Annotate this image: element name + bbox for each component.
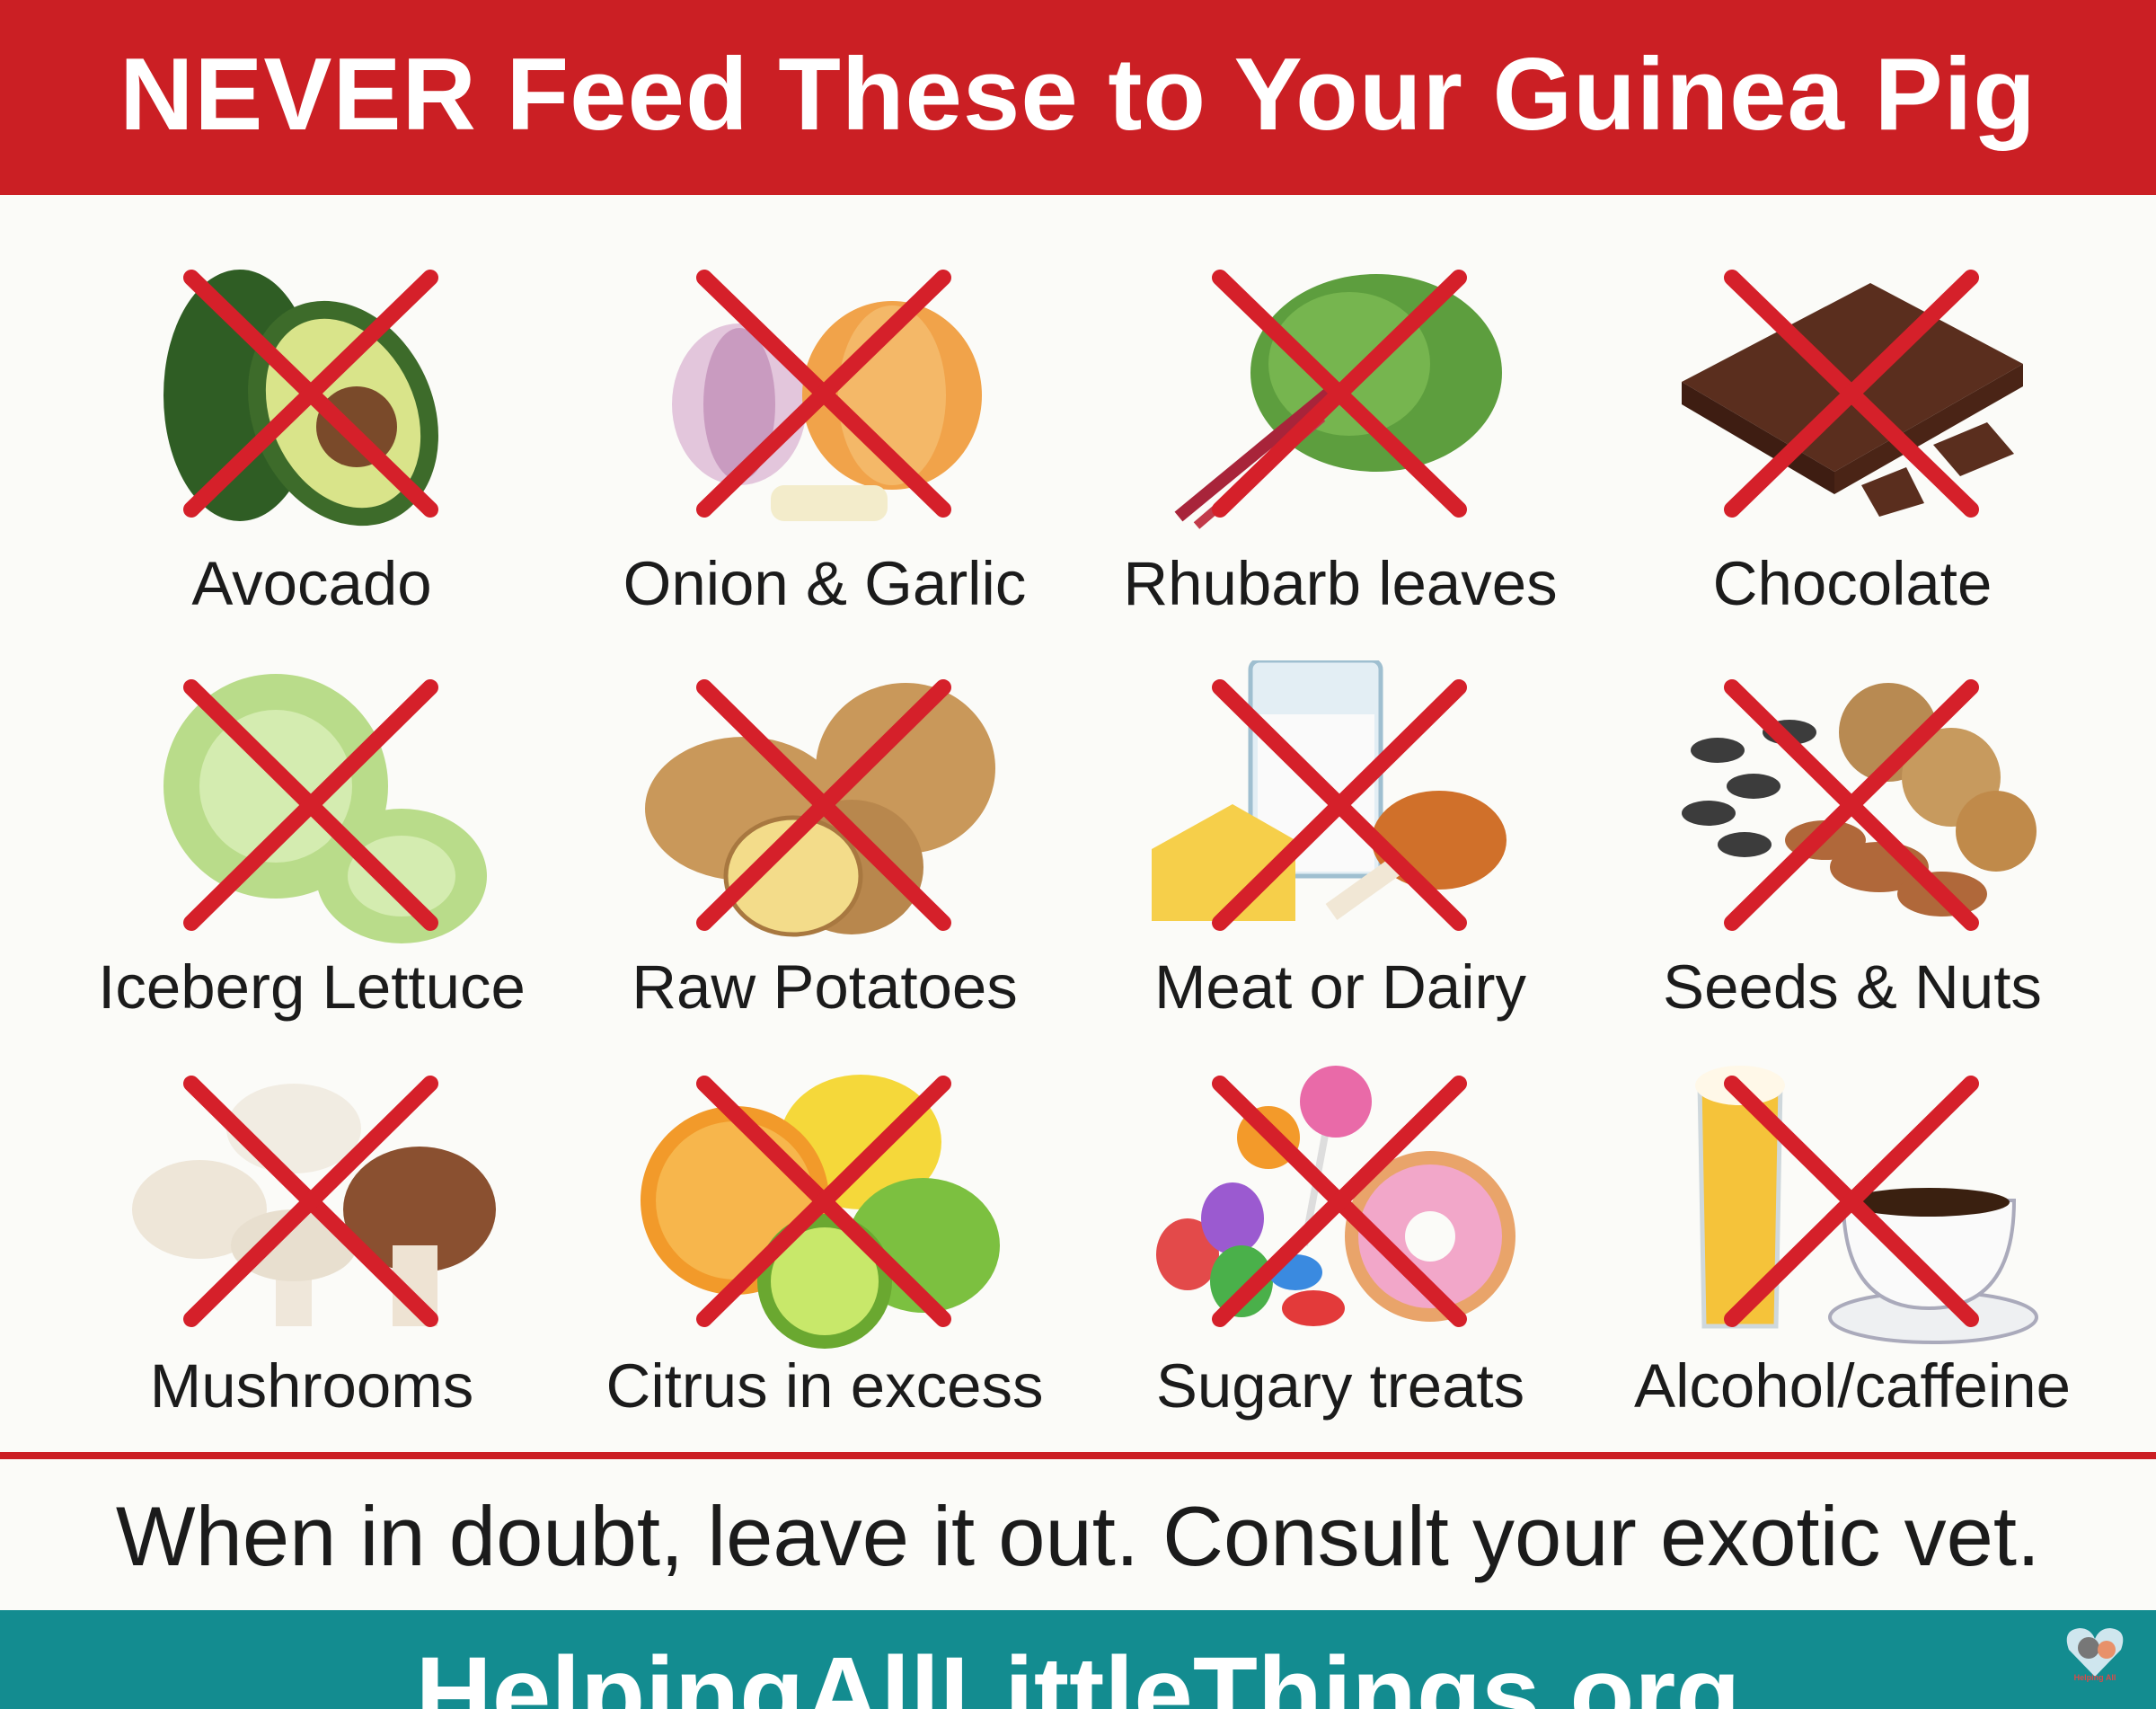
label: avocado: Avocado (191, 549, 432, 618)
label: seeds & nuts: Seeds & Nuts (1663, 952, 2042, 1022)
title (0, 0, 2156, 195)
label: chocolate: Chocolate (1713, 549, 1992, 618)
label: meat or dairy: Meat or Dairy (1154, 952, 1526, 1022)
icon: rhubarb leaves (1175, 270, 1502, 529)
icon: logo (2066, 1628, 2124, 1682)
label: onion & garlic: Onion & Garlic (623, 549, 1026, 618)
label: iceberg lettuce: Iceberg Lettuce (98, 952, 526, 1022)
icon: logo: Helping All (2074, 1673, 2116, 1682)
icon: mushrooms (132, 1076, 496, 1327)
footer (0, 1610, 2156, 1709)
icon: seeds & nuts (1682, 679, 2037, 931)
label: sugary treats: Sugary treats (1156, 1351, 1524, 1421)
label: mushrooms: Mushrooms (150, 1351, 473, 1421)
tagline: When in doubt, leave it out. Consult your exotic vet. (116, 1489, 2040, 1583)
icon: meat or dairy (1152, 660, 1507, 931)
icon: alcohol/caffeine (1695, 1066, 2038, 1344)
label: rhubarb leaves: Rhubarb leaves (1123, 549, 1558, 618)
icon: iceberg lettuce (163, 674, 487, 943)
label: citrus: Citrus in excess (605, 1351, 1043, 1421)
icon: citrus (641, 1075, 1000, 1349)
icon: sugary treats (1156, 1066, 1515, 1327)
label: alcohol/caffeine: Alcohol/caffeine (1634, 1351, 2071, 1421)
title: NEVER Feed These to Your Guinea Pig (119, 38, 2037, 152)
icon: onion & garlic (672, 270, 982, 521)
icon: avocado (163, 270, 438, 527)
label: raw potatoes: Raw Potatoes (632, 952, 1018, 1022)
icon: raw potatoes (645, 679, 995, 936)
icon: chocolate (1682, 270, 2023, 518)
